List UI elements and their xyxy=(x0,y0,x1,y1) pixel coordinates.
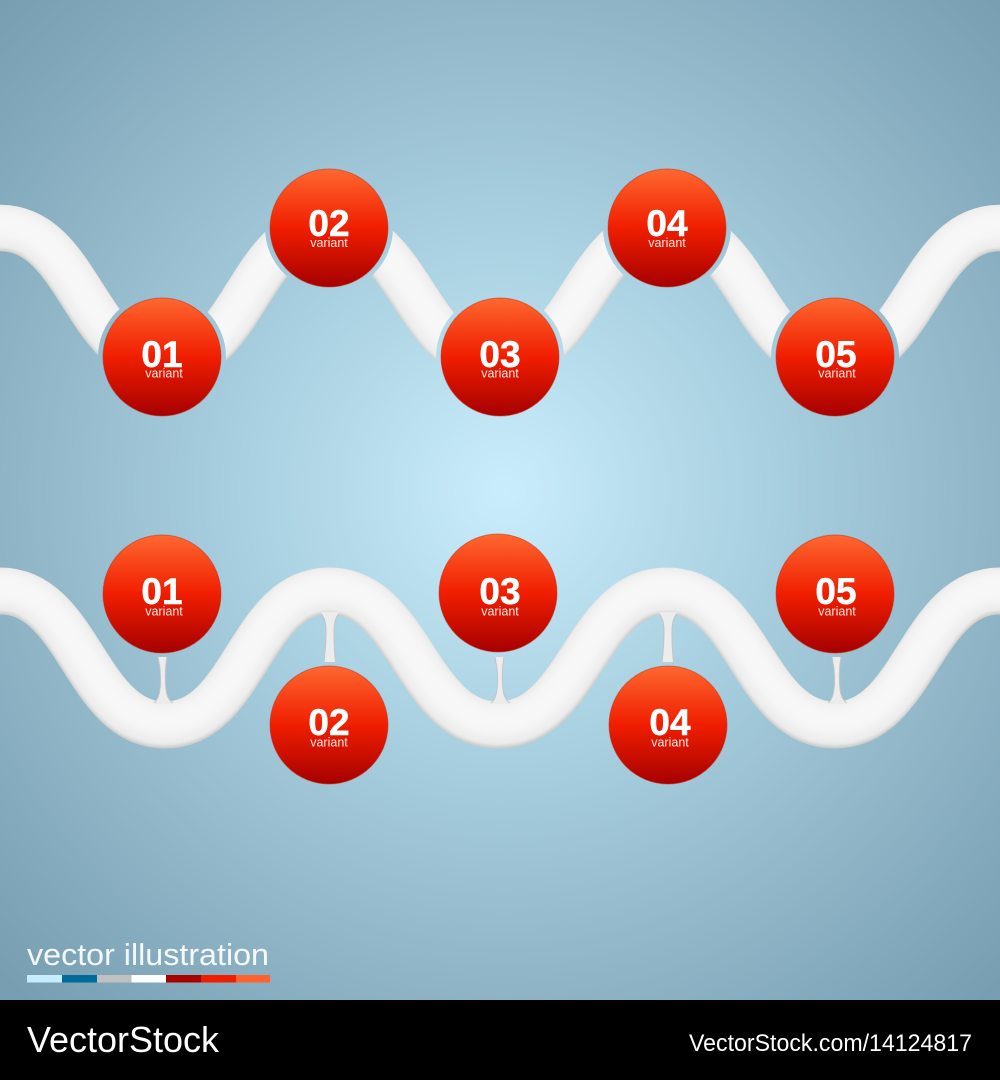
badge bottom 05: variant xyxy=(818,604,856,618)
badge top 04: 04 xyxy=(646,203,688,244)
badge top 04 xyxy=(608,169,726,287)
badge bottom 02: 02 xyxy=(308,702,350,743)
caption: vector illustration: vector illustration xyxy=(27,937,269,972)
badge top 02 xyxy=(270,169,388,287)
badge top 01: 01 xyxy=(141,334,183,375)
footer logo: VectorStock xyxy=(27,1019,220,1060)
badge bottom 02: variant xyxy=(310,736,348,750)
badge top 01: variant xyxy=(145,366,183,380)
footer bar xyxy=(0,1000,1000,1080)
badge bottom 05 xyxy=(776,535,894,653)
badge bottom 04: 04 xyxy=(649,702,691,743)
badge bottom 05: 05 xyxy=(815,571,857,612)
badge top 03: 03 xyxy=(479,334,521,375)
stem 05 xyxy=(828,657,847,704)
stem 03 xyxy=(491,657,510,704)
badge top 05: 05 xyxy=(815,334,857,375)
badge bottom 01: variant xyxy=(145,604,183,618)
stem 02 xyxy=(321,612,339,662)
badge top 03: variant xyxy=(481,366,519,380)
badge bottom 04: variant xyxy=(651,736,689,750)
top wave ribbon xyxy=(0,204,1000,361)
badge bottom 03: 03 xyxy=(479,571,521,612)
badge top 05: variant xyxy=(818,366,856,380)
badge top 04: variant xyxy=(648,236,686,250)
badge bottom 04 xyxy=(609,666,727,784)
colour palette strip xyxy=(27,975,270,982)
footer image id: VectorStock.com/14124817 xyxy=(689,1030,972,1057)
badge top 02: variant xyxy=(310,236,348,250)
top row badges xyxy=(103,169,894,416)
badge top 05 xyxy=(776,298,894,416)
badge bottom 02 xyxy=(270,666,388,784)
stem 01 xyxy=(154,657,173,704)
stem 04 xyxy=(659,612,677,662)
badge bottom 01 xyxy=(103,535,221,653)
badge bottom 03 xyxy=(439,534,557,652)
bottom wave ribbon xyxy=(0,568,1000,748)
connector stems xyxy=(154,612,847,704)
badge top 01 xyxy=(103,298,221,416)
badge top 03 xyxy=(441,298,559,416)
badge top 02: 02 xyxy=(308,203,350,244)
bottom row badges xyxy=(103,534,894,784)
badge bottom 01: 01 xyxy=(141,571,183,612)
badge bottom 03: variant xyxy=(481,604,519,618)
